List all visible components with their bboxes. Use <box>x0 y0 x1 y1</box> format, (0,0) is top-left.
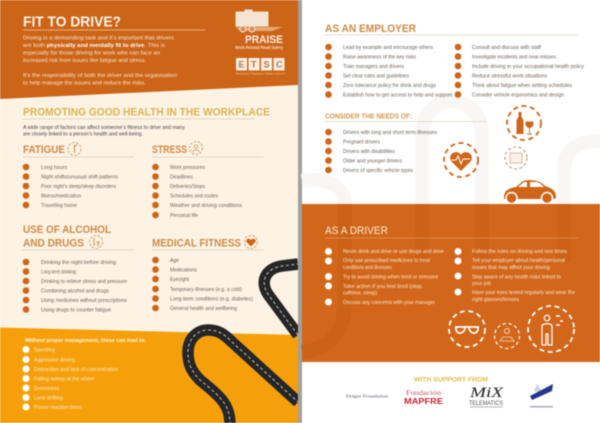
section: as an employer: Train managers and drivers <box>343 64 404 70</box>
section: stress: Deliveries/Stops <box>170 184 205 190</box>
driver advice right column: Stay aware of any health risks linked to <box>472 274 561 280</box>
section: as an employer: Consult and discuss with staff <box>472 45 541 51</box>
section: fatigue: Night shifts/unusual shift patterns <box>41 174 118 180</box>
heading: promoting good health: PROMOTING GOOD HEALTH IN THE WORKPLACE <box>23 106 270 118</box>
panel: amber consequences: Without proper management, these can lead to: <box>25 338 146 344</box>
section: medical fitness <box>152 236 264 312</box>
panel: amber consequences: Poorer reaction times <box>34 405 82 411</box>
icon: calendar <box>505 147 527 169</box>
logo: MiX Telematics: TELEMATICS <box>469 400 504 407</box>
section: as an employer <box>325 23 584 98</box>
section: alcohol and drugs: USE OF ALCOHOL <box>23 224 111 236</box>
section: stress: Weather and driving conditions <box>170 203 242 209</box>
panel: amber consequences: Aggressive driving <box>34 358 75 364</box>
driver advice left column <box>325 248 444 306</box>
logo: ETSC: C <box>276 60 283 70</box>
logo: ETSC: S <box>264 60 270 70</box>
logo: PRAISE: PRAISE <box>245 34 283 46</box>
icon: wine bottle and glass <box>507 106 541 140</box>
section: stress: Work pressures <box>170 165 205 171</box>
section: fatigue: Travelling home <box>41 203 77 209</box>
section: fatigue: Illness/medication <box>41 194 81 200</box>
background: darker road shapes <box>302 204 564 352</box>
section: consider the needs of: Drivers with long and short term illnesses <box>343 130 437 136</box>
driver advice left column: Only use prescribed medicines to treat <box>343 258 430 264</box>
section: consider the needs of: CONSIDER THE NEEDS OF: <box>325 114 412 120</box>
section: alcohol and drugs: Using drugs to counter fatigue <box>41 308 111 314</box>
section: alcohol and drugs <box>23 224 135 314</box>
section: alcohol and drugs: Long-term drinking <box>41 270 76 276</box>
driver advice left column: conditions and illnesses <box>343 265 392 271</box>
panel: amber consequences <box>0 328 298 423</box>
logo: ETSC <box>236 58 285 76</box>
section: as an employer: Set clear rules and guidelines <box>343 74 409 80</box>
driver advice right column: Have your eyes tested regularly and wear the <box>472 290 575 296</box>
section: fatigue: FATIGUE <box>23 144 65 156</box>
section: alcohol and drugs: AND DRUGS <box>23 238 84 250</box>
icon: bottle and glass <box>90 236 102 248</box>
section: medical fitness: Long-term conditions (e.g. diabetes) <box>170 296 253 302</box>
section: medical fitness: Medications <box>170 268 197 274</box>
driver advice left column: Discuss any concerns with your manager <box>343 300 435 306</box>
panel: amber consequences: Drowsiness <box>34 386 59 392</box>
icon: tired person <box>528 306 574 352</box>
panel: amber consequences: Falling asleep at the wheel <box>34 376 94 382</box>
driver advice right column: right glasses/lenses <box>472 297 519 303</box>
heading: with support from: WITH SUPPORT FROM <box>414 376 488 384</box>
section: medical fitness: Temporary illnesses (e.g. a cold) <box>170 287 242 293</box>
panel: sponsors <box>346 376 553 408</box>
driver advice right column: issues that may affect your driving <box>472 265 550 271</box>
logo: Fundación MAPFRE: Fundación <box>406 388 441 397</box>
intro text block: increased risk from issues like fatigue and stress. <box>23 58 146 64</box>
section: alcohol and drugs: Using medicines without prescriptions <box>41 298 127 304</box>
section: as an employer: Zero tolerance policy for drink and drugs <box>343 83 436 89</box>
illustration: winding road <box>188 264 298 423</box>
heading: as a driver: AS A DRIVER <box>325 225 388 237</box>
section: medical fitness: MEDICAL FITNESS <box>152 238 241 250</box>
icon: car <box>504 180 556 204</box>
section: medical fitness: Eyesight <box>170 277 189 283</box>
icon: fatigue <box>68 142 81 156</box>
section: consider the needs of: Pregnant drivers <box>343 140 380 146</box>
logo: ETSC: European Transport Safety Council <box>236 72 285 76</box>
section: as an employer: Think about fatigue when setting schedules <box>472 83 572 89</box>
panel: orange header <box>0 0 298 99</box>
section: fatigue: Poor night’s sleep/sleep disorders <box>41 184 116 190</box>
section: as an employer: Include driving in your occupational health policy <box>472 64 584 70</box>
intro text block: are both physically and mentally fit to drive . This is <box>23 43 165 49</box>
logo: Fundación MAPFRE: MAPFRE <box>404 397 444 406</box>
intro text block: It’s the responsibility of both the driver and the organisation <box>23 73 177 79</box>
section: as an employer: Reduce stressful work situations <box>472 74 547 80</box>
section: consider the needs of: Drivers with disabilities <box>343 149 395 155</box>
panel: as a driver <box>302 204 600 362</box>
section: as an employer: Establish how to get access to help and support <box>343 92 452 98</box>
logo: PRAISE <box>235 10 283 50</box>
icon: stress <box>190 142 202 154</box>
icon: glasses <box>449 311 485 347</box>
logo: DVR <box>530 384 553 408</box>
driver advice left column: Try to avoid driving when tired or stressed <box>343 274 438 280</box>
driver advice left column: Never drink and drive or use drugs and drive <box>343 249 444 255</box>
driver advice right column: Follow the rules on driving and rest times <box>472 249 567 255</box>
section: consider the needs of: Older and younger drivers <box>343 158 402 164</box>
section: alcohol and drugs: Drinking the night before driving <box>41 260 116 266</box>
logo: PRAISE: Work-Related Road Safety <box>235 45 283 50</box>
logo: MiX Telematics <box>469 385 504 408</box>
logo: Fundación MAPFRE <box>404 388 444 406</box>
intro text block: Driving is a demanding task and it’s important that drivers <box>23 36 174 42</box>
section: as an employer: Investigate incidents and near-misses <box>472 54 556 60</box>
section: as an employer: Lead by example and encourage others <box>343 45 433 51</box>
logo: ETSC: T <box>251 60 257 70</box>
logo: ETSC: E <box>238 60 245 70</box>
section: stress: Personal life <box>170 213 198 219</box>
icon: heart <box>244 236 258 248</box>
icon: heart with pulse <box>444 143 478 177</box>
page divider <box>298 0 302 423</box>
logo: Dräger Foundation: Dräger Foundation <box>346 394 389 398</box>
section: consider the needs of <box>325 114 486 174</box>
section: alcohol and drugs: Drinking to relieve stress and pressure <box>41 279 127 285</box>
section: alcohol and drugs: Combining alcohol and drugs <box>41 288 109 294</box>
section: as an employer: Consider vehicle ergonomics and design <box>472 92 564 98</box>
intro text block: to help manage the issues and reduce the risks. <box>23 80 146 86</box>
section: medical fitness: General health and wellbeing <box>170 306 237 312</box>
section: medical fitness: Age <box>170 258 179 264</box>
intro paragraph: A wide range of factors can affect someone’s fitness to drive and many <box>23 125 185 131</box>
panel: amber consequences: Distraction and lack of concentration <box>34 367 118 373</box>
section: stress <box>152 142 264 219</box>
driver advice left column: caffeine, sleep) <box>343 290 377 296</box>
driver advice right column <box>454 248 575 303</box>
icon: head with gears <box>494 324 520 348</box>
intro text block <box>23 36 177 86</box>
panel: amber consequences: Lane drifting <box>34 396 63 402</box>
driver advice left column: Take action if you feel tired (stop, <box>343 284 423 290</box>
intro paragraph: are closely linked to a person’s health and well-being. <box>23 132 143 138</box>
logo: MiX Telematics: MiX <box>469 385 504 401</box>
section: stress: Schedules and routes <box>170 194 218 200</box>
section: as an employer: Raise awareness of the key risks <box>343 54 416 60</box>
section: as an employer: AS AN EMPLOYER <box>325 23 416 35</box>
intro paragraph <box>23 125 185 138</box>
panel: left page <box>0 0 298 423</box>
driver advice right column: Tell your employer about health/personal <box>472 258 565 264</box>
intro text block: especially for those driving for work who can face an <box>23 50 160 56</box>
driver advice right column: your job <box>472 281 491 287</box>
section: fatigue: Long hours <box>41 165 67 171</box>
background: faint road arches <box>302 101 600 204</box>
section: stress: STRESS <box>152 144 187 156</box>
section: consider the needs of: Drivers of specific vehicle types <box>343 168 413 174</box>
panel: amber consequences: Speeding <box>34 348 55 354</box>
title: FIT TO DRIVE? <box>23 14 121 30</box>
section: fatigue <box>23 142 135 209</box>
section: stress: Deadlines <box>170 174 193 180</box>
